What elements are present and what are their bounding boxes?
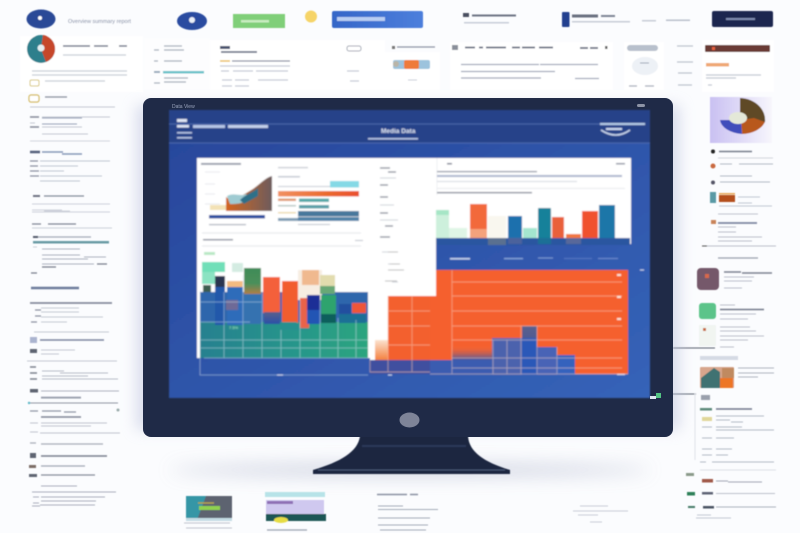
top toolbar [26,10,773,30]
icon card: mauve [697,268,772,290]
screen background [169,110,650,398]
monitor side glow [136,105,680,430]
thumbnail: gradient card [265,492,326,530]
connector with node [660,393,696,398]
thumbnail row [710,192,772,206]
navy tab with text [562,12,690,27]
middle stat list [380,158,437,282]
panel: small list [677,46,693,85]
text block: list three [32,196,110,212]
large orange chart [430,270,628,375]
note card [699,325,764,347]
chart base band [436,238,630,260]
photo thumbnail [700,367,774,388]
panel: media card [702,40,774,92]
panel: activity list [210,40,435,90]
icon: yellow dot [305,10,317,22]
panel: chip [385,52,440,90]
dashboard header [169,110,650,143]
icon: navy badge [26,10,56,28]
monitor stand [313,436,510,474]
stacked bar chart: left: 7.5% [229,325,239,330]
left column [27,95,120,506]
text block: right caption [573,506,628,522]
area and bar panel [201,163,363,255]
screen footer marks [277,270,644,375]
bordered text card [695,393,776,470]
text block: list eight [29,453,116,506]
green button [233,14,285,28]
text block: list six [28,367,119,404]
legend list [710,150,773,184]
text block: center caption [377,494,438,530]
panel: status list [144,38,210,90]
text block: list one [29,95,115,141]
monitor bezel [143,98,673,437]
bottom row [184,492,628,530]
progress block [31,224,112,273]
thumbnail: teal card [184,496,232,528]
bar chart: top right [436,204,628,243]
text block: details [702,214,776,258]
power button [400,412,420,428]
monitor [143,98,673,474]
text block: list two [30,152,110,181]
blue button [332,11,423,28]
right chart header [437,163,625,193]
dark button [712,11,773,27]
text block: list five [27,337,117,361]
white dashboard panel [197,158,631,360]
panel: table [450,42,613,90]
right column [660,97,776,518]
bottom list [686,473,776,518]
toolbar label [463,13,516,24]
panel: pie summary [20,35,143,92]
screen corner node [650,393,661,399]
bezel camera [637,104,645,107]
text block: list seven [30,408,120,444]
connector line [673,347,715,349]
panel: device card [624,42,664,90]
icon card: green [699,303,764,319]
pie chart card [710,97,772,143]
section bar [700,356,738,360]
dashboard header: Media Data [381,128,416,135]
monitor shadow [170,465,650,475]
screen [169,110,650,398]
stacked bar chart: left [200,262,370,358]
toolbar title: Overview summary report [68,19,131,25]
bezel title: Data View [172,104,195,110]
text block: list four [30,288,112,332]
stacked chart gridlines [200,275,368,375]
orange column chart [370,296,440,374]
small legend in chart [385,252,404,281]
icon: navy globe [177,12,207,30]
panels row [20,35,774,92]
